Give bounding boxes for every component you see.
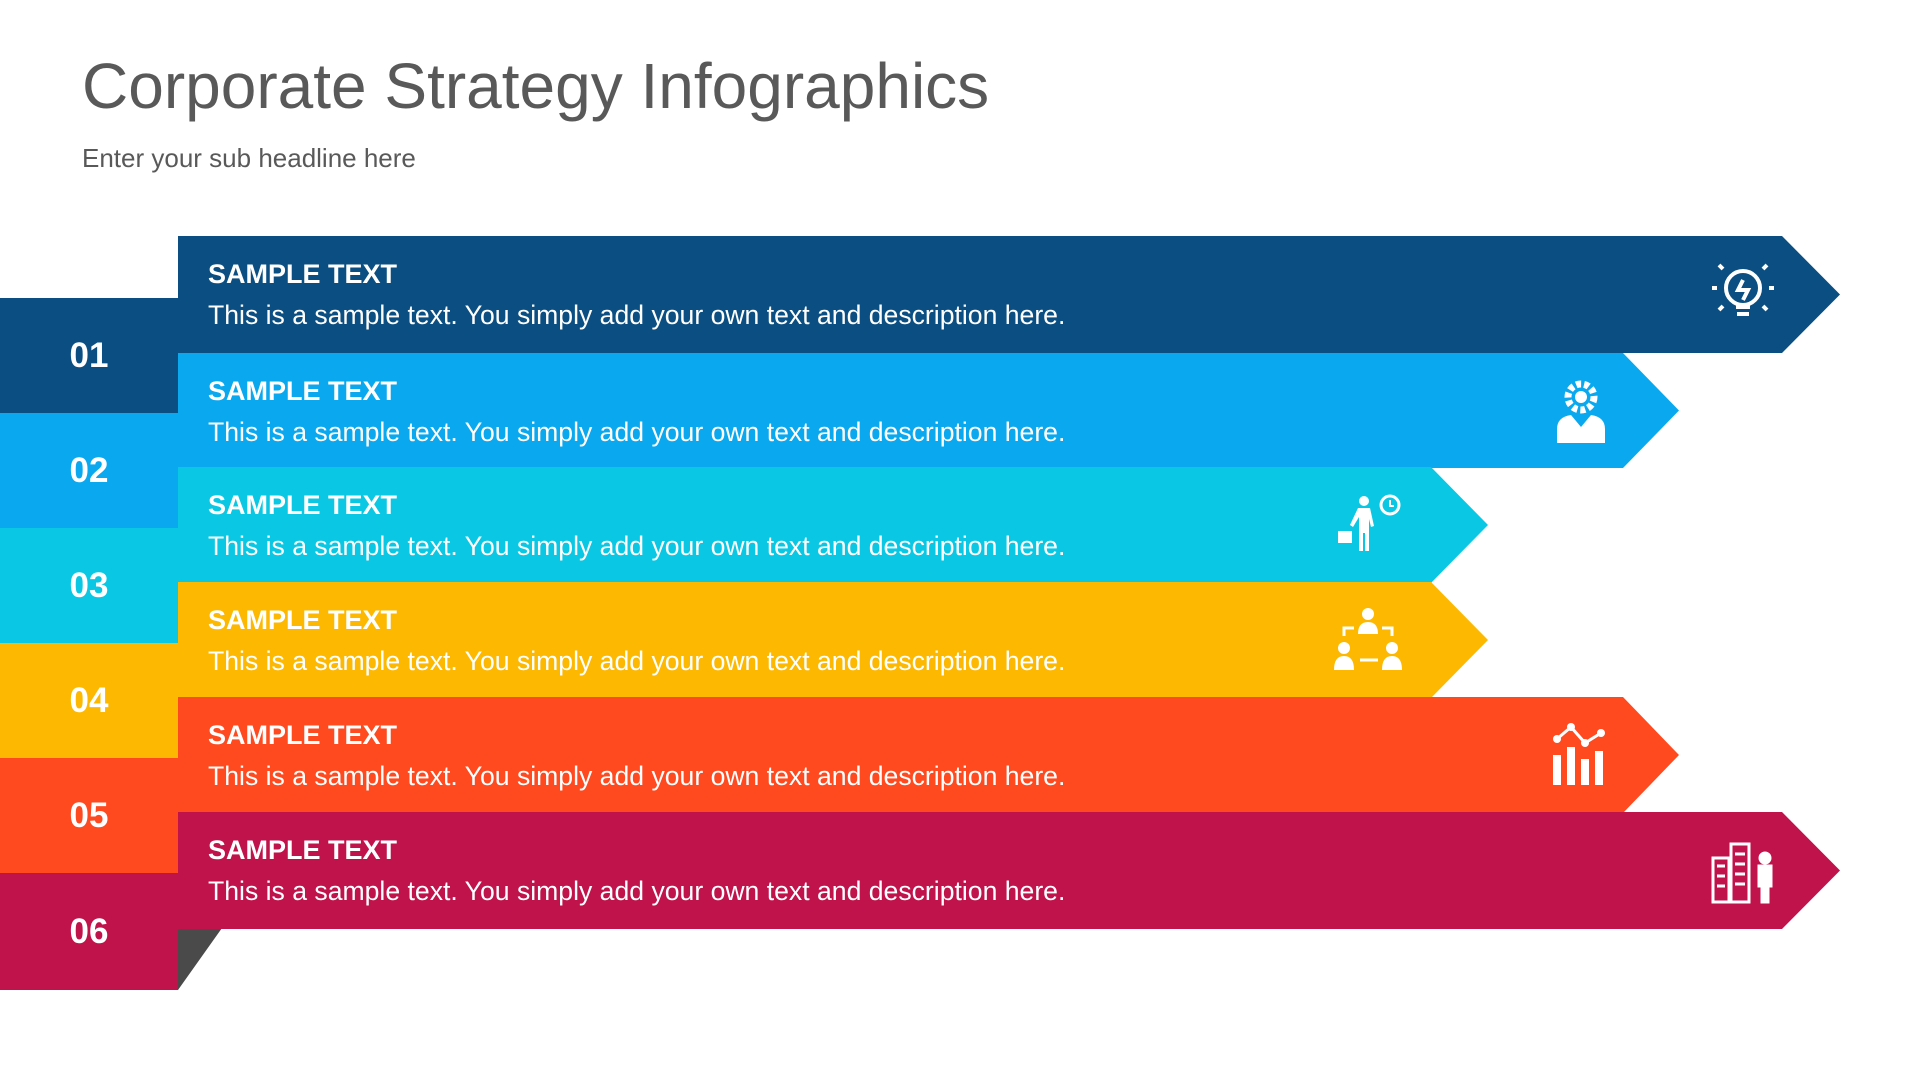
number 06: 06 [70, 912, 108, 950]
row 2: SAMPLE TEXT [208, 376, 397, 406]
number 03: 03 [70, 566, 108, 605]
row 4 [178, 582, 1488, 697]
number 06 [0, 873, 178, 990]
row 1 [178, 236, 1840, 353]
icon: buildings person [1712, 842, 1772, 904]
row 5: SAMPLE TEXT [208, 720, 397, 750]
number 04: 04 [70, 681, 108, 720]
title: Corporate Strategy Infographics [82, 50, 989, 122]
row 4: This is a sample text. You simply add your own text and description here. [208, 646, 1065, 676]
icon: team [1334, 608, 1402, 670]
number 02 [0, 413, 178, 529]
row 3 [178, 467, 1488, 582]
row 2: This is a sample text. You simply add your own text and description here. [208, 417, 1065, 447]
row 6: SAMPLE TEXT [208, 835, 397, 865]
row 4: SAMPLE TEXT [208, 605, 397, 635]
row 1: This is a sample text. You simply add your own text and description here. [208, 300, 1065, 330]
number 03 [0, 528, 178, 644]
row 6 [178, 812, 1840, 929]
number 05 [0, 758, 178, 874]
icon: businessman clock [1338, 494, 1400, 551]
number 04 [0, 643, 178, 759]
row 5 [178, 697, 1679, 812]
icon: bar chart [1553, 723, 1605, 785]
fold shadow [178, 929, 222, 990]
row 3: This is a sample text. You simply add your own text and description here. [208, 531, 1065, 561]
number 01 [0, 298, 178, 414]
number 02: 02 [70, 451, 108, 490]
icon: lightbulb [1712, 264, 1774, 316]
row 2 [178, 353, 1679, 468]
row 5: This is a sample text. You simply add your own text and description here. [208, 761, 1065, 791]
row 3: SAMPLE TEXT [208, 490, 397, 520]
row 1: SAMPLE TEXT [208, 259, 397, 289]
row 6: This is a sample text. You simply add your own text and description here. [208, 876, 1065, 906]
number 01: 01 [70, 336, 108, 375]
number 05: 05 [70, 796, 108, 835]
icon: gear person [1557, 380, 1605, 443]
subtitle: Enter your sub headline here [82, 143, 416, 173]
